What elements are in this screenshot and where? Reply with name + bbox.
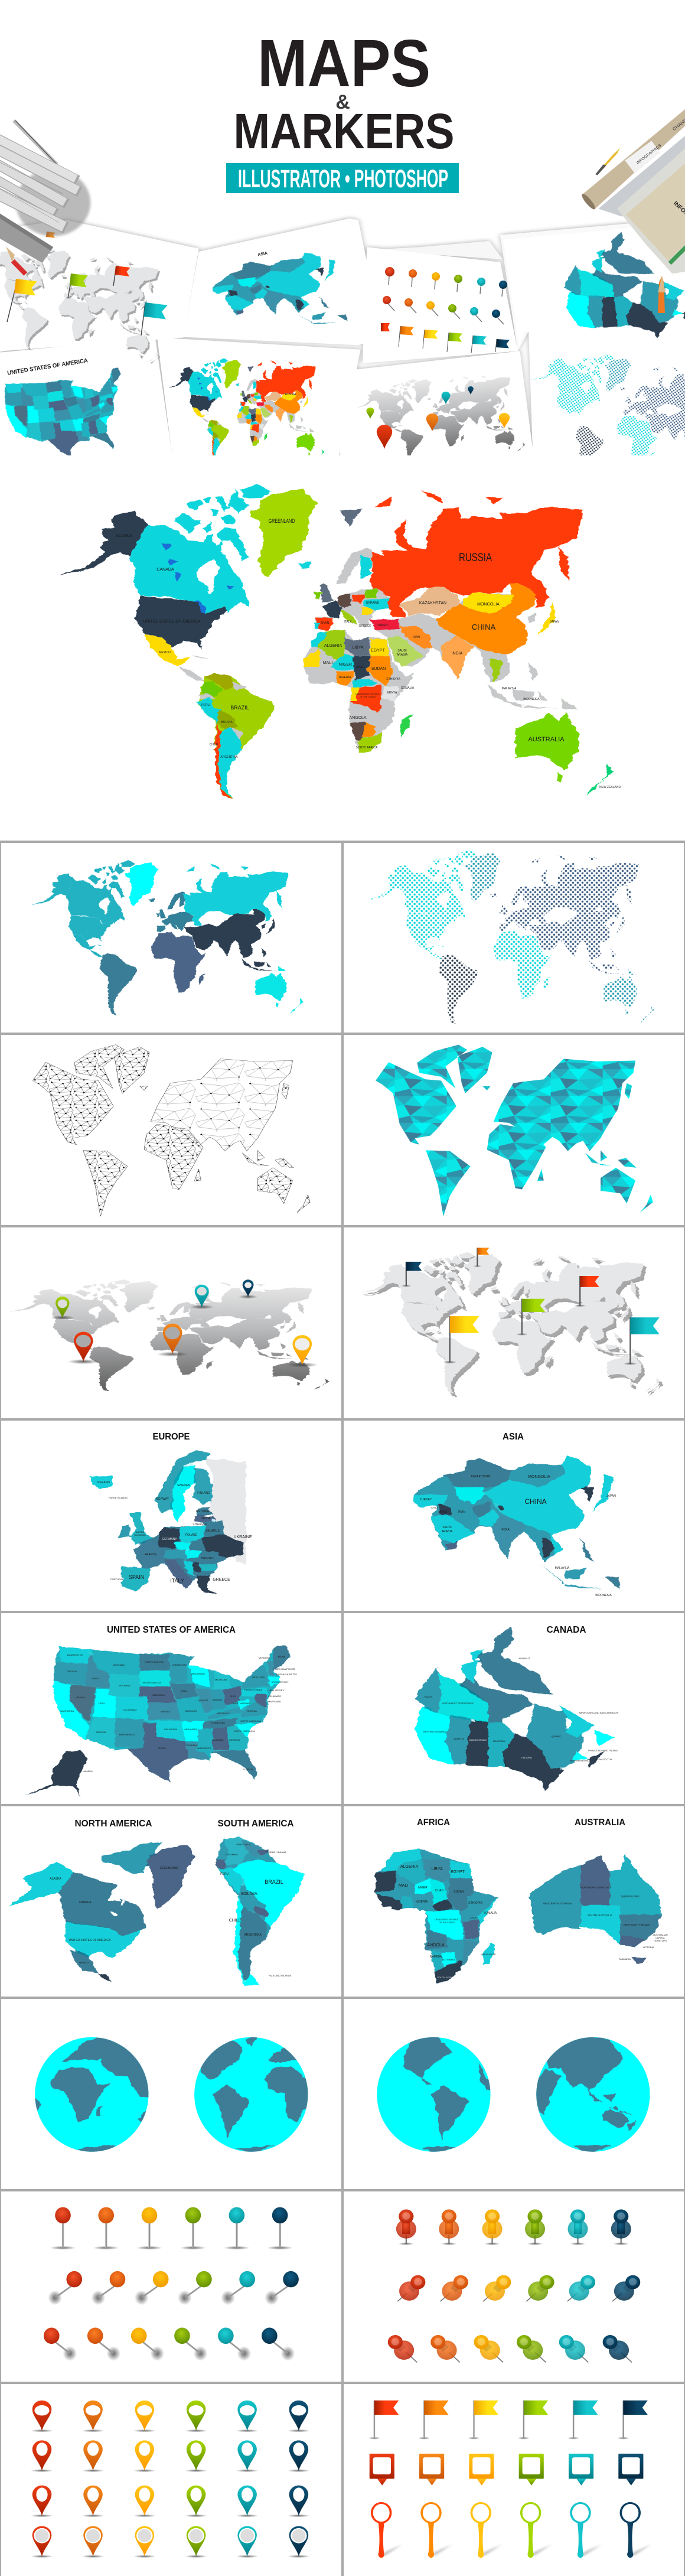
state labels: SOUTH DAKOTA (142, 1681, 161, 1684)
Europe labels: SPAIN (129, 1574, 144, 1580)
Europe labels: ITALY (170, 1578, 184, 1584)
state labels: FLORIDA (243, 1768, 253, 1771)
sheet: dotted map (530, 354, 685, 455)
title: MARKERS: MARKERS (234, 103, 455, 159)
Asia labels: MONGOLIA (528, 1475, 550, 1479)
Europe labels: LITHUANIA (193, 1523, 207, 1526)
country labels: PERU (201, 704, 210, 707)
Europe labels: FINLAND (197, 1491, 210, 1495)
Africa and Australia labels: VICTORIA (643, 1946, 654, 1949)
flags (401, 1248, 660, 1365)
country labels: KAZAKHSTAN (419, 601, 446, 605)
state labels: CALIFORNIA (60, 1709, 74, 1712)
state labels: MISSOURI (185, 1709, 197, 1712)
state labels: LOUISIANA (185, 1744, 198, 1747)
row: upright ball pins (50, 2207, 293, 2250)
Europe labels: LATVIA (201, 1517, 211, 1520)
Asia labels: SAUDI (442, 1526, 452, 1529)
Asia countries (413, 1455, 619, 1589)
main colourful world map (59, 484, 621, 799)
panel: grey gradient map with location pins (9, 1279, 330, 1392)
province labels: ONTARIO (521, 1756, 532, 1759)
panel: globes America and Asia (377, 2036, 650, 2154)
panel: teardrop location markers (31, 2401, 310, 2558)
Europe labels: ESTONIA (196, 1510, 210, 1513)
Europe labels: GREECE (213, 1578, 230, 1582)
country labels: DEMOCRATIC REPUBLIC (355, 693, 380, 695)
country labels: LIBYA (352, 646, 364, 650)
Africa and Australia labels: WESTERN AUSTRALIA (543, 1902, 572, 1905)
state labels (60, 1653, 297, 1773)
banner: Illustrator and Photoshop (226, 163, 459, 193)
state labels: WEST VIRGINIA (233, 1702, 250, 1705)
state labels: MINNESOTA (172, 1663, 187, 1666)
province labels: SASKATCHEWAN (469, 1739, 487, 1741)
panel: 3D world map with flags (360, 1248, 664, 1397)
Africa and Australia labels: SUDAN (454, 1890, 464, 1894)
Americas labels: CHILE (229, 1919, 242, 1923)
sheets of paper (0, 219, 685, 458)
sheet: 3D map with flags (0, 232, 172, 366)
Europe labels: POLAND (185, 1533, 198, 1537)
sheet: pins and flags (381, 267, 510, 353)
Africa and Australia labels: CAPITAL (655, 1936, 666, 1939)
Africa and Australia labels: MADAGASCAR (481, 1953, 496, 1956)
state labels: IOWA (181, 1689, 187, 1692)
Americas labels: BRAZIL (265, 1879, 283, 1885)
country labels: AUSTRALIA (528, 736, 565, 743)
province labels: PRINCE EDWARD ISLAND (588, 1749, 618, 1752)
province labels: MANITOBA (493, 1740, 505, 1743)
Africa and Australia labels: EGYPT (451, 1870, 465, 1874)
state labels: NEW YORK (252, 1676, 265, 1679)
country labels: ALGERIA (324, 644, 342, 648)
panel: United States map (26, 1625, 297, 1797)
country labels: CANADA (156, 568, 174, 572)
province labels: NOVA SCOTIA (596, 1758, 612, 1761)
Americas labels: FRENCH GUIANA (266, 1851, 286, 1854)
state labels: NEBRASKA (152, 1694, 165, 1696)
grid of panel dividers (0, 841, 685, 2576)
panel: ball-head map pins (44, 2207, 299, 2361)
sheet: colourful world map (168, 358, 324, 461)
country labels: NIGERIA (339, 676, 351, 679)
Europe labels: UKRAINE (233, 1535, 252, 1539)
row: flags (368, 2401, 648, 2440)
globe: Africa side (32, 2036, 151, 2154)
Europe labels: BELARUS (206, 1529, 220, 1533)
country labels: ARGENTINA (220, 755, 238, 759)
state labels: MISSISSIPPI (197, 1747, 211, 1750)
Africa and Australia labels: NAMIBIA (430, 1955, 442, 1959)
state labels: INDIANA (213, 1698, 222, 1701)
state labels: GEORGIA (229, 1738, 240, 1741)
Asia labels: SYRIA (431, 1506, 438, 1509)
country labels: CHAD (356, 666, 364, 669)
country labels: SAUDI (397, 649, 407, 653)
panel: Asia map (413, 1432, 619, 1597)
state labels: CONNECTICUT (271, 1681, 289, 1683)
row: upright push pins (396, 2209, 631, 2245)
country labels: RUSSIA (459, 552, 492, 564)
country labels: CHINA (472, 623, 496, 631)
state labels: NORTH DAKOTA (145, 1660, 164, 1663)
row: push pins tilted right (397, 2275, 640, 2301)
row: ball pins tilted right (48, 2271, 299, 2305)
Africa and Australia labels: ALGERIA (400, 1865, 418, 1869)
state labels: ALASKA (83, 1770, 93, 1773)
Europe labels: ROMANIA (201, 1556, 214, 1559)
province labels: NEW BRUNSWICK (570, 1759, 591, 1762)
Europe countries (90, 1450, 246, 1594)
state labels: VERMONT (259, 1656, 271, 1659)
country labels: OF THE CONGO (360, 696, 376, 698)
title: MAPS: MAPS (257, 26, 430, 100)
Africa and Australia labels: SOUTH AUSTRALIA (588, 1914, 612, 1917)
state labels: NORTH CAROLINA (240, 1719, 261, 1722)
state labels: COLORADO (123, 1708, 136, 1711)
country labels: KENYA (387, 691, 397, 695)
Americas labels: BOLIVIA (241, 1892, 257, 1896)
country labels: GREECE (358, 624, 371, 628)
Africa and Australia labels: ETHIOPIA (468, 1901, 482, 1905)
row: round hole markers (31, 2401, 310, 2432)
Greenland (125, 863, 158, 906)
state labels: ARIZONA (96, 1731, 106, 1734)
Americas labels: ARGENTINA (244, 1933, 262, 1937)
state labels: KENTUCKY (217, 1712, 230, 1715)
Oceania (255, 966, 304, 1014)
dotted Greenland (465, 853, 501, 901)
Americas labels: COLOMBIA (225, 1853, 238, 1856)
country labels: GREENLAND (268, 518, 295, 524)
North America (31, 860, 135, 958)
Africa and Australia labels: CHAD (435, 1889, 443, 1893)
Africa and Australia labels: NEW SOUTH WALES (624, 1923, 650, 1926)
state labels: NEVADA (76, 1696, 85, 1699)
state labels: OREGON (67, 1670, 77, 1673)
country labels: ALASKA (116, 534, 132, 538)
state labels: UTAH (99, 1702, 105, 1705)
3D map (360, 1252, 664, 1397)
Asia labels: ARABIA (442, 1530, 453, 1533)
sheet: USA map: UNITED STATES OF AMERICA (7, 357, 89, 377)
state labels: TEXAS (158, 1747, 166, 1750)
panel: low-poly world map (376, 1045, 653, 1216)
sheet: Asia map (213, 252, 348, 324)
province labels: BRITISH COLUMBIA (423, 1730, 446, 1733)
Asia labels: JAPAN (606, 1494, 616, 1498)
country labels: UKRAINE (366, 601, 380, 605)
heading: South America: SOUTH AMERICA (217, 1819, 294, 1829)
Africa and Australia labels: QUEENSLAND (621, 1895, 640, 1898)
Africa and Australia labels: MALI (399, 1884, 408, 1888)
Asia labels: MALAYSIA (555, 1567, 570, 1570)
state labels: MAINE (278, 1655, 286, 1658)
Africa and Australia labels: NIGER (418, 1886, 428, 1890)
Asia labels: IRAQ (440, 1510, 447, 1514)
Africa and Australia labels: SOUTH AFRICA (437, 1976, 455, 1979)
province labels: ALBERTA (454, 1737, 464, 1740)
row: push pins tilted left (388, 2335, 632, 2362)
Asia labels: CHINA (524, 1497, 547, 1506)
Americas labels: VENEZUELA (236, 1843, 250, 1846)
row: ring markers (371, 2502, 652, 2558)
Africa and Australia labels: DEMOCRATIC REPUBLIC (435, 1919, 459, 1921)
country labels: TURKEY (376, 624, 389, 627)
sheet: USA map (4, 358, 121, 455)
state labels: NEW MEXICO (119, 1733, 135, 1736)
province labels: NUNAVUT (518, 1657, 530, 1660)
Africa and Australia labels: LIBYA (431, 1867, 443, 1871)
country labels: SUDAN (371, 667, 386, 671)
Americas labels: MEXICO (79, 1961, 89, 1964)
Asia labels: INDONESIA (595, 1594, 612, 1597)
Africa and Australia labels: OF THE CONGO (439, 1922, 455, 1924)
dotted South America (439, 955, 478, 1024)
Asia labels: KAZAKHSTAN (471, 1475, 491, 1478)
provinces (413, 1627, 614, 1791)
Asia labels: INDIA (501, 1528, 510, 1532)
country labels: MALAYSIA (502, 687, 517, 691)
country labels: JAPAN (550, 620, 559, 624)
US states (26, 1645, 291, 1797)
row: square markers (370, 2454, 643, 2486)
country labels: INDIA (452, 652, 463, 656)
sheet: Asia map: ASIA (257, 252, 268, 257)
Americas labels: CANADA (79, 1901, 92, 1904)
state labels: VIRGINIA (246, 1709, 257, 1712)
country labels: UNITED STATES OF AMERICA (143, 620, 201, 624)
panel: network mesh world map (32, 1045, 310, 1216)
globe: Asia side (534, 2036, 650, 2154)
heading: Asia: ASIA (503, 1432, 524, 1442)
province labels (423, 1657, 618, 1762)
heading: Australia: AUSTRALIA (575, 1818, 625, 1828)
Africa and Australia labels (399, 1865, 668, 1979)
Americas labels: FALKLAND ISLANDS (269, 1974, 292, 1977)
Asia labels: IRAN (458, 1510, 465, 1514)
Africa and Australia labels: KENYA (470, 1916, 478, 1919)
Asia labels (420, 1475, 616, 1597)
row: slim hole markers (31, 2440, 310, 2472)
Africa and Australia labels: AUSTRALIAN (653, 1933, 668, 1936)
panel: flags and square and ring markers (368, 2401, 652, 2558)
country labels: ETHIOPIA (386, 678, 400, 681)
desk items: kraft tube, book and pencil: INFOGRAPHICS (636, 144, 663, 165)
Africa and Australia labels: TASMANIA (619, 1958, 631, 1961)
South America (100, 953, 136, 1015)
sheet: Canada map (564, 232, 685, 338)
Americas labels: GREENLAND (159, 1867, 178, 1870)
Africa and Australia labels: SOMALIA (484, 1911, 497, 1915)
country labels: IRAN (413, 636, 420, 639)
state labels: ILLINOIS (198, 1699, 208, 1702)
Europe labels (97, 1481, 252, 1584)
Europe labels: NORWAY (156, 1497, 169, 1501)
country labels (116, 518, 621, 789)
heading: North America: NORTH AMERICA (74, 1819, 152, 1829)
state labels: OKLAHOMA (164, 1728, 178, 1731)
country labels: ITALY (344, 620, 352, 624)
state labels: KANSAS (161, 1710, 170, 1713)
Europe labels: PORTUGAL (110, 1578, 124, 1581)
state labels: DELAWARE (268, 1695, 281, 1698)
dotted Eurasia (490, 854, 639, 974)
state labels: OHIO (230, 1695, 236, 1698)
state labels: ARKANSAS (184, 1728, 197, 1731)
location pins (50, 1279, 318, 1367)
country labels: NEW ZEALAND (599, 786, 621, 789)
Europe labels: ICELAND (97, 1481, 110, 1484)
country labels: NIGER (339, 663, 352, 667)
row: ball pins tilted left (44, 2328, 295, 2361)
Europe labels: FRANCE (145, 1553, 157, 1556)
Africa and Australia labels: NIGERIA (416, 1900, 428, 1904)
country shapes (59, 484, 614, 799)
heading: Africa: AFRICA (417, 1818, 450, 1828)
Europe (148, 892, 193, 933)
row: narrow hole markers (31, 2486, 310, 2517)
state labels: PENNSYLVANIA (244, 1688, 262, 1691)
state labels: MARYLAND (268, 1700, 281, 1703)
globe: America side (377, 2036, 494, 2154)
Africa and Australia labels: TERRITORY (654, 1939, 667, 1942)
row: silver ring markers (31, 2526, 310, 2558)
Americas labels: ALASKA (50, 1877, 61, 1881)
header collage of map sheets and desk items (0, 109, 685, 455)
Americas labels: PERU (220, 1872, 229, 1876)
state labels: ALABAMA (213, 1738, 224, 1741)
province labels: NEWFOUNDLAND AND LABRADOR (579, 1711, 618, 1714)
dotted Africa (494, 930, 552, 999)
sheet: grey map with pins (358, 376, 526, 455)
heading: Europe: EUROPE (152, 1432, 190, 1442)
Americas labels: UNITED STATES OF AMERICA (69, 1939, 111, 1942)
North and South America countries (9, 1837, 305, 1986)
panel: dotted world map (366, 850, 655, 1024)
state labels: NEW HAMPSHIRE (275, 1668, 295, 1670)
state labels: WASHINGTON (67, 1653, 83, 1656)
Africa and Australia labels: ANGOLA (427, 1943, 445, 1948)
panel: push pins (388, 2209, 640, 2362)
country labels: BRAZIL (230, 705, 249, 711)
panel: Canada map (413, 1625, 618, 1791)
Europe labels: SWEDEN (177, 1484, 190, 1487)
state labels: MASSACHUSETTS (276, 1673, 297, 1676)
country labels: BOLIVIA (221, 721, 233, 724)
state labels: TENNESSEE (211, 1721, 225, 1724)
panel: North and South America maps (9, 1819, 305, 1986)
panel: Europe map (90, 1432, 252, 1594)
title: ampersand: & (335, 91, 350, 113)
province labels: YUKON (424, 1695, 432, 1698)
Africa (151, 932, 206, 992)
panel: Africa and Australia maps (376, 1818, 668, 1984)
Africa and Australia labels: BOTSWANA (442, 1958, 456, 1961)
dotted North America (366, 850, 477, 959)
country labels: CHILE (210, 743, 218, 747)
desk items: kraft tube, book and pencil (580, 109, 685, 273)
banner: Illustrator and Photoshop: ILLUSTRATOR • PHOTOSHOP (238, 165, 448, 193)
Americas labels (50, 1843, 292, 1977)
Africa and Australia labels: NORTHERN TERRITORY (580, 1886, 611, 1889)
country labels: SOUTH AFRICA (356, 746, 378, 750)
province labels: NORTHWEST TERRITORIES (442, 1702, 474, 1705)
dotted Oceania (604, 969, 655, 1022)
Southern Asia (184, 909, 277, 971)
country labels: SPAIN (321, 621, 330, 625)
Northern Asia (182, 864, 289, 926)
Europe labels: UNITED (136, 1530, 145, 1533)
country labels: SOMALIA (401, 686, 415, 690)
Europe labels: GERMANY (162, 1538, 177, 1541)
panel: continents colour map (31, 860, 304, 1015)
state labels: SOUTH CAROLINA (234, 1730, 255, 1732)
state labels: MONTANA (113, 1663, 125, 1666)
country labels: EGYPT (371, 649, 386, 653)
state labels: IDAHO (92, 1677, 99, 1680)
heading: Canada: CANADA (547, 1625, 586, 1635)
country labels: ANGOLA (349, 716, 367, 720)
state labels: WYOMING (119, 1684, 131, 1687)
country labels: MALI (323, 661, 332, 665)
Europe labels: KINGDOM (134, 1533, 146, 1536)
country labels: ARABIA (397, 653, 408, 657)
state labels: WISCONSIN (191, 1672, 205, 1675)
country labels: MONGOLIA (477, 603, 500, 607)
globe: Atlantic side (194, 2036, 312, 2154)
Europe labels: FAROE ISLANDS (109, 1496, 128, 1499)
province labels: QUEBEC (552, 1735, 562, 1738)
grey world map (9, 1279, 330, 1392)
Asia labels: TURKEY (420, 1498, 432, 1502)
state labels: MICHIGAN (215, 1678, 227, 1681)
country labels: MEXICO (159, 651, 171, 654)
heading: USA: UNITED STATES OF AMERICA (107, 1625, 236, 1635)
country labels: INDONESIA (523, 698, 540, 701)
panel: globes Africa and Atlantic (32, 2036, 312, 2154)
Africa and Australia regions (376, 1849, 661, 1984)
sheet: colourful world map: RUSSIA (285, 393, 296, 396)
desk items: pen, paper rolls, ruler and pencil (0, 121, 90, 274)
state labels: NEW JERSEY (269, 1689, 284, 1692)
